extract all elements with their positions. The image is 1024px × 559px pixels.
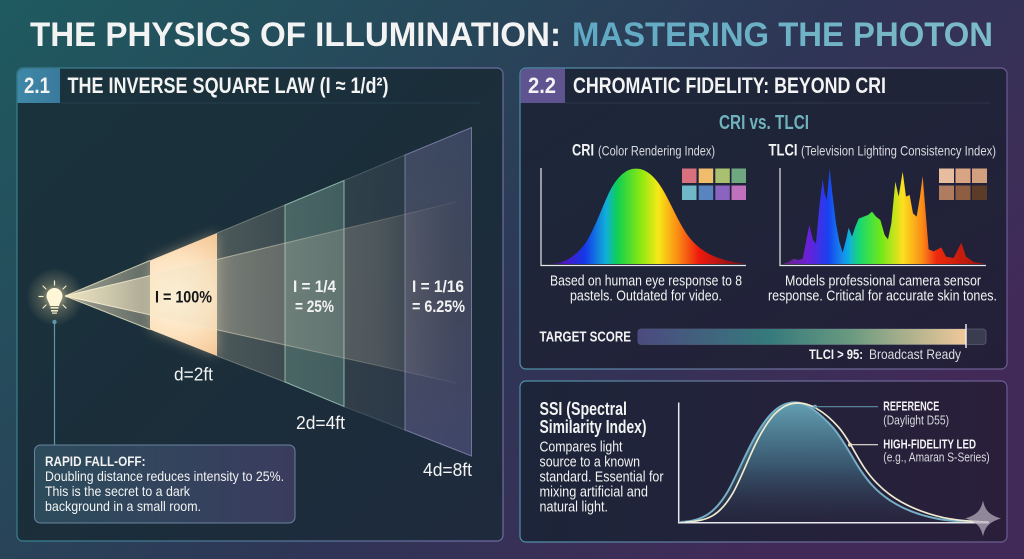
chart heading: CRI: CRI <box>572 140 594 160</box>
CRI description: pastels. Outdated for video. <box>570 288 722 304</box>
frame at 2d=4ft <box>285 180 344 406</box>
CRI description: Based on human eye response to 8 <box>550 272 742 290</box>
target score caption: TLCI > 95: <box>809 346 863 362</box>
chart heading: CRI: (Color Rendering Index) <box>598 142 715 158</box>
label: d=2ft: d=2ft <box>174 364 213 384</box>
inner beam <box>65 202 456 383</box>
label: 6.25%: = 6.25% <box>412 297 465 316</box>
chart: TLCI spectrum <box>780 168 987 266</box>
chart: spectral comparison <box>679 402 989 523</box>
callout: rapid fall-off <box>34 445 295 523</box>
reference curve <box>680 402 989 522</box>
title: THE PHYSICS OF ILLUMINATION: <box>30 16 561 54</box>
subheading: CRI vs TLCI: CRI vs. TLCI <box>719 112 809 134</box>
icon: light bulb <box>26 268 84 326</box>
chart heading: CRI <box>572 140 715 160</box>
TLCI description: Models professional camera sensor <box>785 272 981 290</box>
SSI description <box>540 439 664 516</box>
frame at 4d=8ft <box>405 128 472 456</box>
section tab 2.1: 2.1 <box>24 73 50 98</box>
target score label: TARGET SCORE <box>540 328 631 346</box>
label: 4d=8ft: 4d=8ft <box>423 460 472 480</box>
callout: rapid fall-off: This is the secret to a dark <box>45 483 191 499</box>
SSI description: standard. Essential for <box>540 469 664 486</box>
chart: CRI spectrum <box>541 168 746 266</box>
callout: high-fidelity LED: HIGH-FIDELITY LED <box>883 437 976 451</box>
label: 25% <box>293 277 336 316</box>
frame at d=2ft <box>150 233 217 356</box>
reference area <box>680 402 989 522</box>
section tab 2.2: 2.2 <box>528 73 556 98</box>
TLCI description <box>768 272 997 304</box>
light cone diagram <box>65 128 472 456</box>
heading: inverse square law: THE INVERSE SQUARE LAW (I ≈ 1/d²) <box>68 73 388 98</box>
label: 100%: I = 100% <box>155 288 212 306</box>
LED curve <box>685 403 989 522</box>
SSI description: natural light. <box>540 499 608 516</box>
title <box>30 16 993 54</box>
callout: rapid fall-off: Doubling distance reduces intensity to 25%. <box>45 468 284 484</box>
CRI colour swatches <box>682 168 746 200</box>
heading: SSI <box>540 399 647 437</box>
outer cone <box>65 128 472 456</box>
heading: SSI: SSI (Spectral <box>540 399 627 419</box>
cone edges <box>65 155 456 430</box>
callout: reference <box>813 400 949 427</box>
heading: chromatic fidelity: CHROMATIC FIDELITY: BEYOND CRI <box>573 73 886 98</box>
icon: sparkle <box>965 500 1001 536</box>
SSI description: source to a known <box>540 454 640 471</box>
leader line from bulb to callout <box>52 320 57 445</box>
section tab 2.1 <box>18 69 60 103</box>
target score caption <box>809 346 961 362</box>
label: 2d=4ft: 2d=4ft <box>296 413 345 433</box>
callout: high-fidelity LED: (e.g., Amaran S-Series) <box>883 450 990 465</box>
callout: rapid fall-off: RAPID FALL-OFF: <box>45 453 146 469</box>
frame glow <box>150 233 217 356</box>
label: 25%: I = 1/4 <box>293 277 336 296</box>
target score caption: Broadcast Ready <box>869 346 961 362</box>
callout: reference: REFERENCE <box>883 400 939 414</box>
chart heading: TLCI: TLCI <box>768 140 798 160</box>
panel: chromatic fidelity <box>520 68 1007 369</box>
section tab 2.2 <box>521 69 565 103</box>
label: 6.25%: I = 1/16 <box>412 277 464 296</box>
CRI description <box>550 272 742 304</box>
heading: SSI: Similarity Index) <box>540 417 647 437</box>
callout: rapid fall-off: background in a small room. <box>45 498 201 514</box>
SSI description: Compares light <box>540 439 623 456</box>
skin tone swatches <box>939 168 987 200</box>
callout: high-fidelity LED <box>848 437 990 465</box>
callout: reference: (Daylight D55) <box>883 412 949 427</box>
label: 6.25% <box>412 277 465 316</box>
panel: spectral similarity index <box>520 381 1007 542</box>
title: MASTERING THE PHOTON <box>572 16 993 54</box>
chart heading: TLCI <box>768 140 996 160</box>
SSI description: mixing artificial and <box>540 484 648 501</box>
label: 25%: = 25% <box>295 297 334 316</box>
panel: inverse square law <box>17 68 503 541</box>
target score bar <box>638 324 986 348</box>
